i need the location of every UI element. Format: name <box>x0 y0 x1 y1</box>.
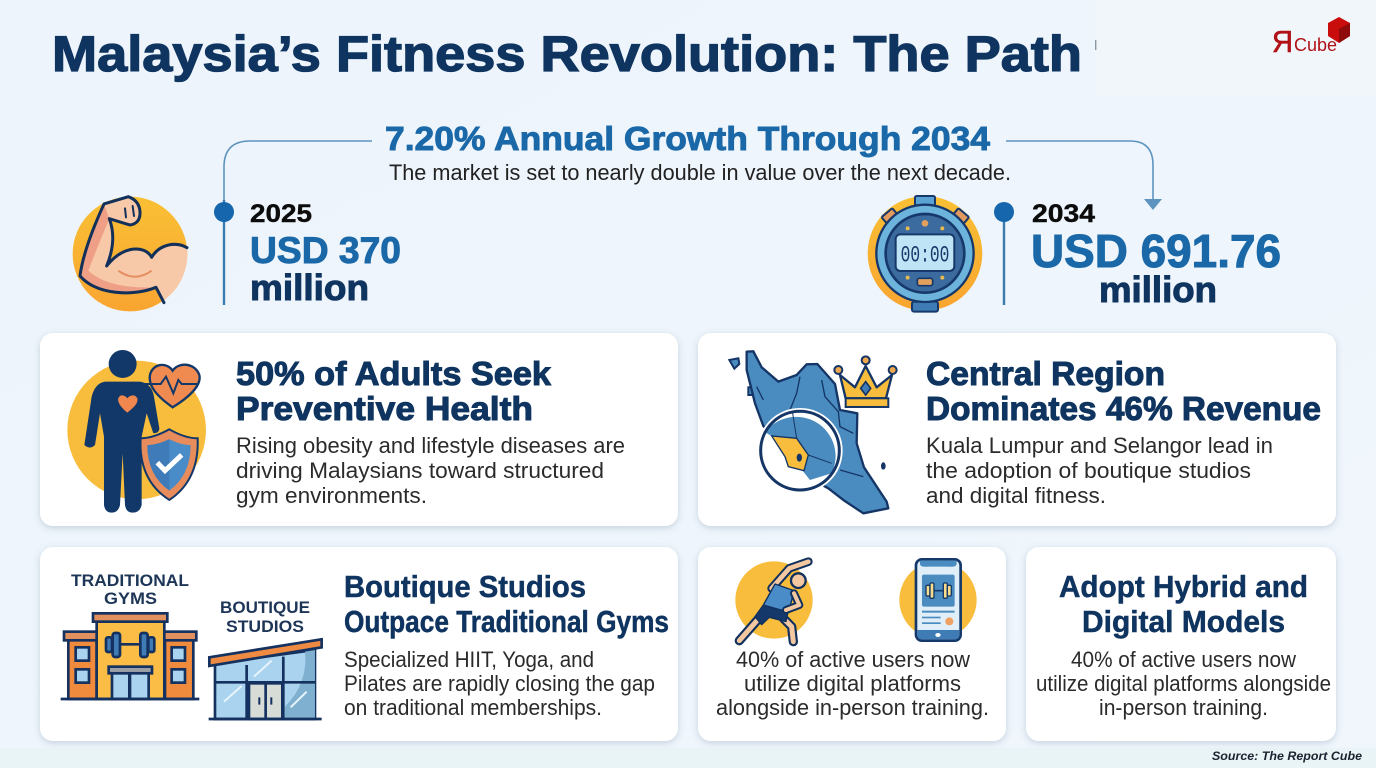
arrow: left timeline connector <box>224 141 372 305</box>
panel: digital users <box>698 547 1006 741</box>
body text: and digital fitness. <box>926 483 1106 508</box>
icon: stopwatch: 00:00 <box>901 244 949 270</box>
body text <box>926 433 1273 508</box>
source note: Source: The Report Cube <box>1212 749 1362 763</box>
icon: flexed arm <box>73 197 187 311</box>
body text <box>344 647 655 720</box>
body text <box>1036 647 1331 720</box>
icon: person with heart and shield <box>67 350 206 513</box>
logo: Cube <box>1294 35 1337 55</box>
stat: 2034: USD 691.76 <box>1031 225 1281 277</box>
panel: hybrid and digital models <box>1026 547 1336 741</box>
label: traditional gyms: TRADITIONAL <box>71 572 189 590</box>
body text: gym environments. <box>236 483 427 508</box>
panel: boutique studios <box>40 547 678 741</box>
icon: boutique studio building <box>209 639 322 719</box>
body text: Kuala Lumpur and Selangor lead in <box>926 433 1273 458</box>
body text: driving Malaysians toward structured <box>236 458 604 483</box>
heading <box>344 569 669 639</box>
growth subheading: The market is set to nearly double in value over the next decade. <box>389 160 1011 185</box>
stat: 2025: million <box>250 267 369 308</box>
label: boutique studios: STUDIOS <box>226 618 304 636</box>
panel: preventive health <box>40 333 678 526</box>
body text: Specialized HIIT, Yoga, and <box>344 647 594 672</box>
body text <box>716 647 989 720</box>
heading: Dominates 46% Revenue <box>926 390 1321 427</box>
heading <box>926 355 1321 427</box>
timeline line and dot 2034 <box>994 202 1014 305</box>
body text: utilize digital platforms <box>744 671 961 696</box>
body text: in-person training. <box>1099 695 1268 720</box>
icon: smartphone fitness app <box>899 559 977 641</box>
label: boutique studios <box>220 599 310 636</box>
body text <box>236 433 625 508</box>
body text: 40% of active users now <box>736 647 970 672</box>
heading: Adopt Hybrid and <box>1059 569 1308 604</box>
logo: Я <box>1272 24 1293 59</box>
body text: utilize digital platforms alongside <box>1036 671 1331 696</box>
stat: 2034 <box>1031 200 1281 310</box>
heading: Outpace Traditional Gyms <box>344 604 669 639</box>
icon: traditional gym building <box>61 613 199 699</box>
body text: 40% of active users now <box>1071 647 1296 672</box>
stat: 2034: 2034 <box>1032 200 1095 228</box>
timeline dot 2025 <box>214 202 234 222</box>
heading: Digital Models <box>1082 604 1285 639</box>
heading <box>1059 569 1308 639</box>
growth heading: 7.20% Annual Growth Through 2034 <box>385 120 991 157</box>
stat: 2025 <box>250 200 401 308</box>
stat: 2025: USD 370 <box>250 230 401 271</box>
arrow: right timeline connector <box>1006 141 1162 210</box>
body text: Rising obesity and lifestyle diseases are <box>236 433 625 458</box>
heading: Boutique Studios <box>344 569 586 604</box>
heading: Central Region <box>926 355 1165 392</box>
label: traditional gyms <box>71 572 189 608</box>
heading <box>236 355 552 427</box>
panel: central region <box>698 333 1336 526</box>
heading: 50% of Adults Seek <box>236 355 552 392</box>
label: boutique studios: BOUTIQUE <box>220 599 310 617</box>
logo <box>1272 17 1350 59</box>
icon: stretching person <box>735 561 813 642</box>
body text: on traditional memberships. <box>344 695 602 720</box>
body text: the adoption of boutique studios <box>926 458 1251 483</box>
icon: stopwatch <box>868 196 982 312</box>
body text: alongside in-person training. <box>716 695 989 720</box>
stat: 2034: million <box>1099 269 1217 310</box>
heading: Preventive Health <box>236 390 533 427</box>
title: Malaysia’s Fitness Revolution: The Path <box>52 26 1082 82</box>
body text: Pilates are rapidly closing the gap <box>344 671 655 696</box>
icon: peninsular Malaysia map with crown <box>729 351 897 513</box>
label: traditional gyms: GYMS <box>104 590 157 608</box>
stat: 2025: 2025 <box>250 200 312 228</box>
